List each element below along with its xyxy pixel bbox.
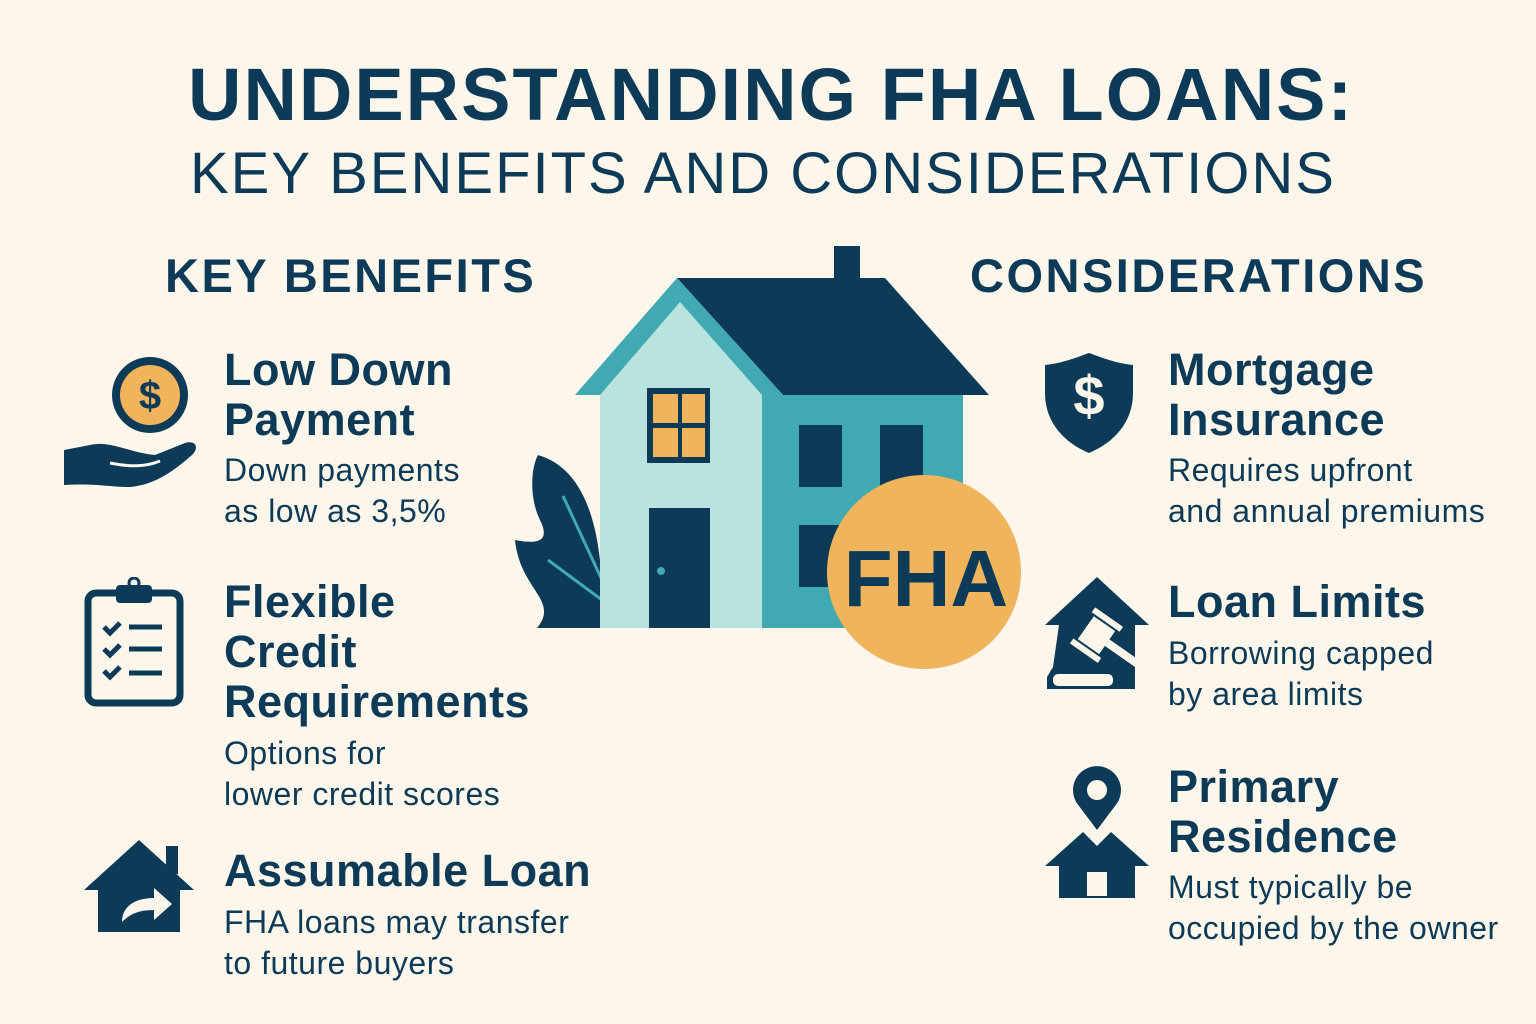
subtitle: KEY BENEFITS AND CONSIDERATIONS	[190, 141, 1336, 206]
benefit: flexible credit: lower credit scores	[224, 776, 500, 812]
icon: shield with dollar: $	[1073, 364, 1105, 427]
benefit: flexible credit: Requirements	[224, 676, 530, 727]
benefit: assumable loan	[84, 840, 591, 981]
benefit: low down payment	[64, 344, 460, 529]
consideration: loan limits: Borrowing capped	[1168, 635, 1434, 671]
consideration: primary residence: occupied by the owner	[1168, 910, 1499, 946]
consideration: mortgage insurance: Mortgage	[1168, 344, 1374, 395]
consideration: primary residence: Residence	[1168, 811, 1398, 862]
benefit: flexible credit	[84, 576, 530, 812]
consideration: mortgage insurance: Requires upfront	[1168, 452, 1413, 488]
consideration: loan limits: by area limits	[1168, 676, 1364, 712]
icon: house with gavel	[1045, 577, 1149, 689]
benefit: assumable loan: Assumable Loan	[224, 845, 591, 896]
badge: FHA: FHA	[844, 534, 1008, 623]
badge: FHA	[827, 475, 1021, 669]
title: UNDERSTANDING FHA LOANS:	[188, 53, 1354, 136]
icon: shield with dollar	[1045, 353, 1133, 453]
benefit: low down payment: Down payments	[224, 452, 460, 488]
icon: leaf	[515, 455, 602, 628]
benefit: assumable loan: to future buyers	[224, 945, 454, 981]
icon: house with location pin	[1045, 766, 1149, 898]
consideration: primary residence: Primary	[1168, 761, 1339, 812]
icon: hand with coin: $	[139, 374, 161, 418]
benefit: low down payment: as low as 3,5%	[224, 493, 446, 529]
benefit: flexible credit: Flexible	[224, 576, 396, 627]
heading: key benefits: KEY BENEFITS	[165, 249, 536, 302]
consideration: primary residence: Must typically be	[1168, 869, 1413, 905]
benefit: low down payment: Low Down	[224, 344, 453, 395]
consideration: mortgage insurance: and annual premiums	[1168, 493, 1485, 529]
icon: house with arrow	[84, 840, 194, 932]
consideration: mortgage insurance: Insurance	[1168, 394, 1385, 445]
benefit: assumable loan: FHA loans may transfer	[224, 904, 569, 940]
benefit: low down payment: Payment	[224, 394, 415, 445]
consideration: primary residence	[1045, 761, 1499, 946]
consideration: loan limits: Loan Limits	[1168, 576, 1426, 627]
icon: hand with coin	[64, 357, 196, 487]
consideration: mortgage insurance	[1045, 344, 1485, 529]
benefit: flexible credit: Credit	[224, 626, 357, 677]
icon: clipboard	[84, 577, 184, 706]
consideration: loan limits	[1045, 576, 1434, 712]
heading: considerations: CONSIDERATIONS	[970, 249, 1427, 302]
benefit: flexible credit: Options for	[224, 735, 386, 771]
